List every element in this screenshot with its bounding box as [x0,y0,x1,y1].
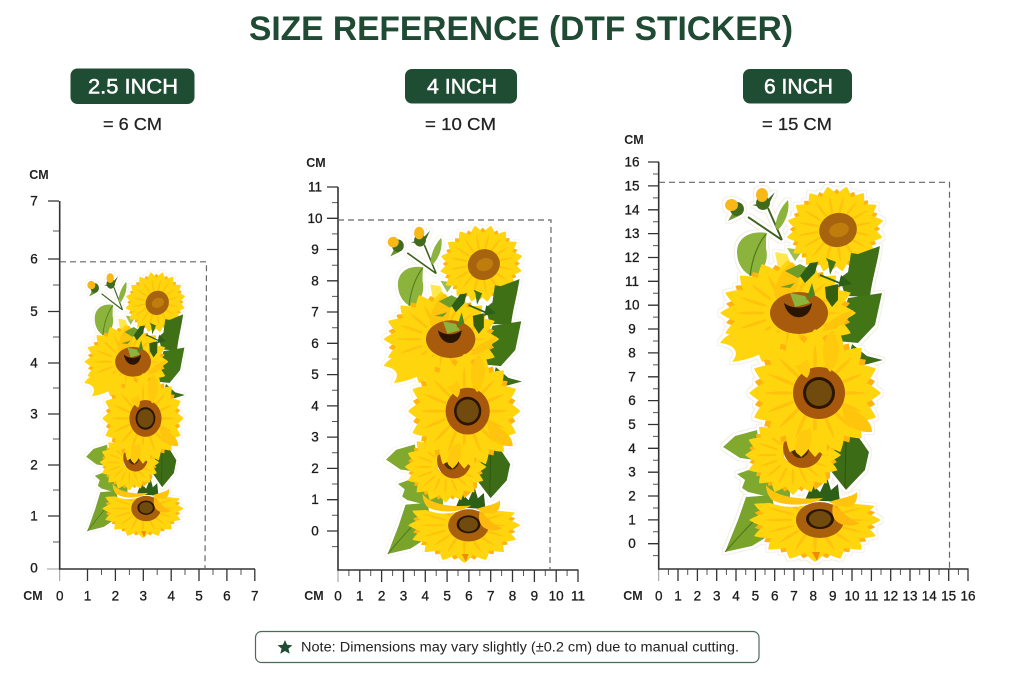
ruler chart: 7 cm: 5 [195,588,203,604]
ruler chart: 7 cm: CM [23,589,43,603]
ruler chart: 16 cm: 15 [624,178,640,193]
ruler chart: 16 cm: 4 [732,588,740,604]
ruler chart: 16 cm: 3 [713,588,720,604]
ruler chart: 16 cm: 0 [655,588,662,604]
ruler chart: 7 cm: 4 [30,356,38,370]
ruler chart: 11 cm: 5 [311,367,319,382]
ruler chart: 16 cm: 3 [628,465,636,480]
ruler chart: 7 cm: 4 [167,588,175,604]
ruler chart: 16 cm: 16 [624,154,640,170]
ruler chart: 16 cm: 9 [829,588,836,604]
ruler chart: 16 cm: 5 [752,588,759,604]
badge: 6 inch [743,69,852,104]
panel: 6 inch size [623,69,976,604]
ruler chart: 11 cm: 3 [311,430,319,445]
ruler chart: 11 cm: 10 [549,588,564,604]
ruler chart: 11 cm: 4 [422,588,430,604]
ruler chart: 11 cm: CM [306,156,326,170]
ruler chart: 11 cm [304,156,585,604]
badge: 6 inch: 6 INCH [764,76,833,98]
conversion: 10 cm: = 10 CM [425,114,496,134]
ruler chart: 16 cm: 0 [628,536,636,551]
ruler chart: 11 cm: 8 [509,588,516,604]
ruler chart: 11 cm: 1 [311,492,319,507]
ruler chart: 16 cm: 1 [628,512,636,527]
ruler chart: 16 cm: 13 [902,588,918,604]
ruler chart: 11 cm: 10 [307,211,323,226]
ruler chart: 16 cm: CM [623,589,643,603]
ruler chart: 11 cm: 2 [311,461,319,476]
title: SIZE REFERENCE (DTF STICKER) [249,10,793,48]
ruler chart: 7 cm: 1 [30,508,38,524]
ruler chart: 11 cm: 1 [356,588,364,604]
ruler chart: 11 cm: 3 [400,588,407,604]
conversion: 15 cm: = 15 CM [762,114,832,134]
ruler chart: 16 cm: 14 [922,588,937,604]
ruler chart: 11 cm: 5 [443,588,451,604]
ruler chart: 7 cm: 0 [30,560,38,576]
ruler chart: 7 cm: 7 [251,588,259,604]
ruler chart: 11 cm: 9 [531,588,538,604]
ruler chart: 11 cm: 11 [308,180,322,194]
ruler chart: 7 cm: 7 [30,194,38,208]
badge: 4 inch [405,69,517,104]
ruler chart: 11 cm: 4 [311,398,319,413]
ruler chart: 11 cm: 11 [571,588,585,604]
ruler chart: 11 cm: 6 [311,336,319,351]
ruler chart: 7 cm: 6 [223,588,231,604]
ruler chart: 16 cm: 2 [694,588,701,604]
ruler chart: 7 cm: 1 [84,588,91,604]
panel: 4 inch size [304,69,585,604]
note text: Note: Dimensions may vary slightly (±0.2 cm) due to manual cutting. [301,640,739,654]
panel: 2.5 inch size [23,68,259,604]
ruler chart: 7 cm: 2 [112,588,119,604]
ruler chart: 16 cm: 7 [790,588,798,604]
ruler chart: 16 cm: 1 [674,588,682,604]
ruler chart: 16 cm: 2 [628,488,636,504]
ruler chart: 11 cm: CM [304,589,324,603]
ruler chart: 16 cm [623,133,976,604]
note callout [256,632,759,662]
badge: 2.5 inch: 2.5 INCH [88,76,178,98]
icon: star [278,640,292,654]
ruler chart: 16 cm: 12 [883,588,898,604]
ruler chart: 16 cm: 10 [844,588,860,604]
ruler chart: 16 cm: 14 [624,202,640,217]
ruler chart: 16 cm: 16 [960,588,976,604]
sunflower sticker: small [80,262,193,541]
ruler chart: 16 cm: 7 [628,369,636,384]
badge: 2.5 inch [70,68,194,104]
conversion: 6 cm: = 6 CM [103,114,162,134]
ruler chart: 11 cm: 6 [465,588,473,604]
ruler chart: 7 cm: 3 [30,406,38,422]
ruler chart: 7 cm: 5 [30,304,38,319]
badge: 4 inch: 4 INCH [427,76,497,98]
ruler chart: 7 cm: 0 [56,588,63,604]
ruler chart: 7 cm: 6 [30,252,38,266]
ruler chart: 16 cm: 15 [941,588,956,604]
ruler chart: 7 cm: 2 [30,458,38,472]
ruler chart: 11 cm: 2 [378,588,385,604]
ruler chart: 16 cm: 5 [628,417,636,432]
ruler chart: 11 cm: 0 [334,588,342,604]
ruler chart: 16 cm: CM [624,133,644,147]
ruler chart: 7 cm [23,168,259,604]
ruler chart: 16 cm: 9 [628,322,636,336]
ruler chart: 16 cm: 8 [810,588,817,604]
ruler chart: 16 cm: 11 [864,588,878,604]
ruler chart: 11 cm: 8 [311,273,319,288]
ruler chart: 16 cm: 4 [628,441,636,456]
ruler chart: 7 cm: 3 [140,588,147,604]
ruler chart: 16 cm: 13 [624,226,640,241]
ruler chart: 11 cm: 9 [311,242,319,257]
ruler chart: 16 cm: 8 [628,345,636,360]
ruler chart: 16 cm: 6 [771,588,778,604]
ruler chart: 16 cm: 6 [628,393,636,408]
sunflower sticker: medium [377,213,534,567]
ruler chart: 11 cm: 7 [487,588,494,604]
ruler chart: 16 cm: 10 [624,298,640,313]
ruler chart: 16 cm: 12 [624,250,640,265]
sunflower sticker: large [713,173,897,566]
ruler chart: 11 cm: 7 [311,304,319,320]
ruler chart: 7 cm: CM [29,168,49,182]
ruler chart: 11 cm: 0 [311,524,319,538]
ruler chart: 16 cm: 11 [625,274,639,289]
